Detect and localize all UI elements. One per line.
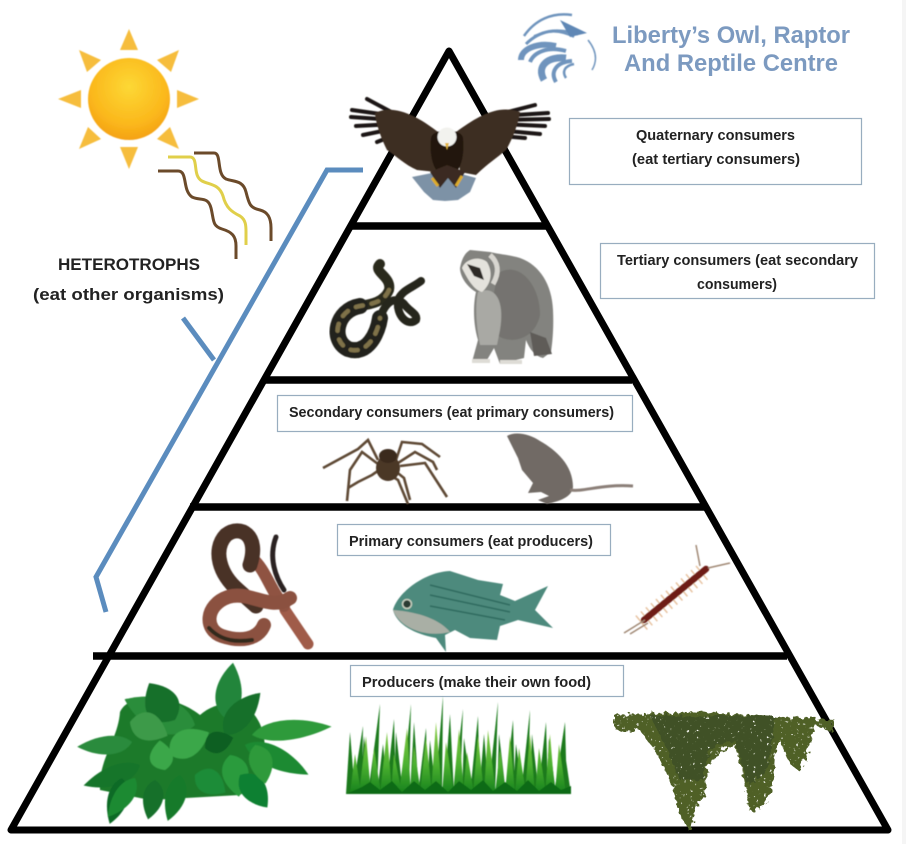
icon: leafy plant [77, 661, 332, 827]
icon: eagle [351, 99, 549, 201]
secondary consumers label: Secondary consumers (eat primary consumers) [289, 404, 614, 421]
heterotrophs label: (eat other organisms) [33, 285, 224, 304]
icon: snake [338, 264, 421, 350]
icon: fish [393, 571, 553, 652]
icon: eagle logo [521, 14, 595, 82]
icon: hanging moss [614, 712, 835, 832]
logo: And Reptile Centre [624, 50, 838, 77]
tertiary consumers label: consumers) [697, 276, 777, 293]
icon: sun [58, 29, 199, 169]
tertiary consumers label [600, 244, 874, 298]
heterotrophs bracket [96, 170, 363, 612]
quaternary consumers label: Quaternary consumers [636, 127, 795, 144]
icon: centipede [624, 545, 730, 634]
quaternary consumers label [570, 118, 862, 184]
producers label [350, 666, 624, 696]
heterotrophs label: HETEROTROPHS [58, 255, 200, 274]
icon: rat [507, 434, 633, 504]
primary consumers label: Primary consumers (eat producers) [349, 533, 593, 550]
logo: Liberty’s Owl, Raptor [612, 22, 850, 49]
heterotrophs label [33, 255, 224, 304]
icon: grass [346, 696, 571, 794]
icon: earthworm [209, 531, 308, 644]
producers label: Producers (make their own food) [362, 674, 591, 691]
tertiary consumers label: Tertiary consumers (eat secondary [617, 252, 859, 269]
icon: heat waves [158, 153, 271, 259]
secondary consumers label [278, 396, 632, 432]
icon: raccoon [460, 250, 553, 364]
primary consumers label [338, 524, 610, 556]
quaternary consumers label: (eat tertiary consumers) [632, 151, 800, 168]
logo [521, 14, 850, 82]
icon: spider [323, 440, 447, 504]
